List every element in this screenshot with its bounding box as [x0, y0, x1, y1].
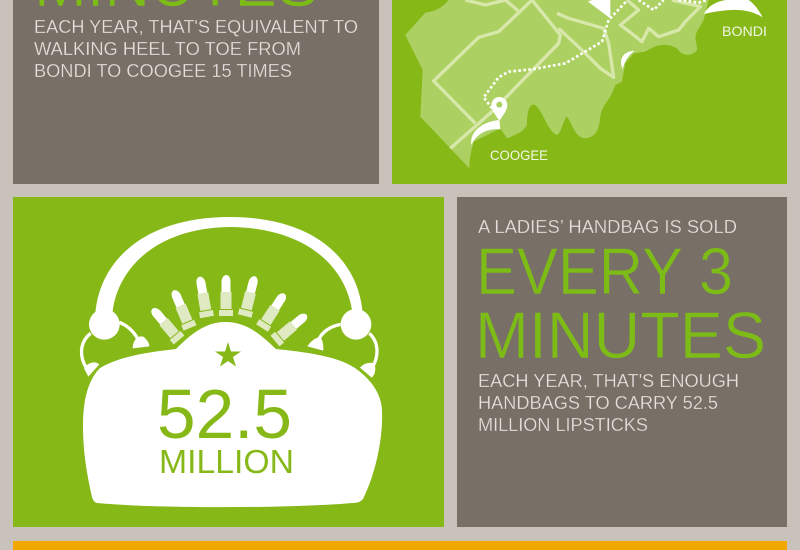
bag handle: [95, 217, 363, 320]
text block: heel to toe comparison: EACH YEAR, THAT'S EQUIVALENT TO: [34, 17, 358, 37]
label: Bondi: BONDI: [722, 23, 767, 39]
icon: star: [215, 342, 241, 366]
bag body: [83, 322, 382, 507]
text block: lipstick comparison: HANDBAGS TO CARRY 52.5: [478, 393, 718, 413]
map: walking route: [484, 0, 707, 108]
map: Bondi beach: [704, 0, 763, 17]
text block: lipstick comparison: MILLION LIPSTICKS: [478, 415, 648, 435]
map artwork: [405, 0, 763, 168]
label: million: MILLION: [159, 443, 294, 480]
panel: orange footer band: [13, 541, 787, 550]
label: Coogee: COOGEE: [490, 147, 548, 163]
map: roads: [434, 0, 700, 148]
lipsticks: [147, 275, 311, 346]
heading: every 3 minutes: MINUTES: [475, 298, 766, 372]
panel: handbag statistic: [457, 197, 787, 527]
icon: location pin: [491, 97, 507, 121]
text block: lipstick comparison: EACH YEAR, THAT'S ENOUGH: [478, 371, 739, 391]
text block: heel to toe comparison: BONDI TO COOGEE 15 TIMES: [34, 61, 292, 81]
map: headland marker: [588, 0, 610, 18]
map: middle beach: [621, 51, 635, 69]
text: handbag lead-in: A LADIES’ HANDBAG IS SOLD: [478, 217, 737, 237]
map: land area: [405, 0, 709, 168]
heading: every 3 minutes: [475, 234, 766, 372]
panel: handbag illustration: [13, 197, 444, 527]
panel: Bondi to Coogee statistic: [13, 0, 379, 184]
text block: lipstick comparison: [478, 371, 739, 435]
map: Coogee beach: [471, 120, 500, 145]
number: 52.5: 52.5: [157, 375, 292, 453]
heading: every 3 minutes: EVERY 3: [476, 234, 733, 308]
panel: map of Bondi to Coogee: [392, 0, 787, 184]
icon: handbag: [82, 217, 382, 507]
text block: heel to toe comparison: [34, 17, 358, 81]
text block: heel to toe comparison: WALKING HEEL TO TOE FROM: [34, 39, 301, 59]
handle rings and clasps: [82, 309, 377, 378]
